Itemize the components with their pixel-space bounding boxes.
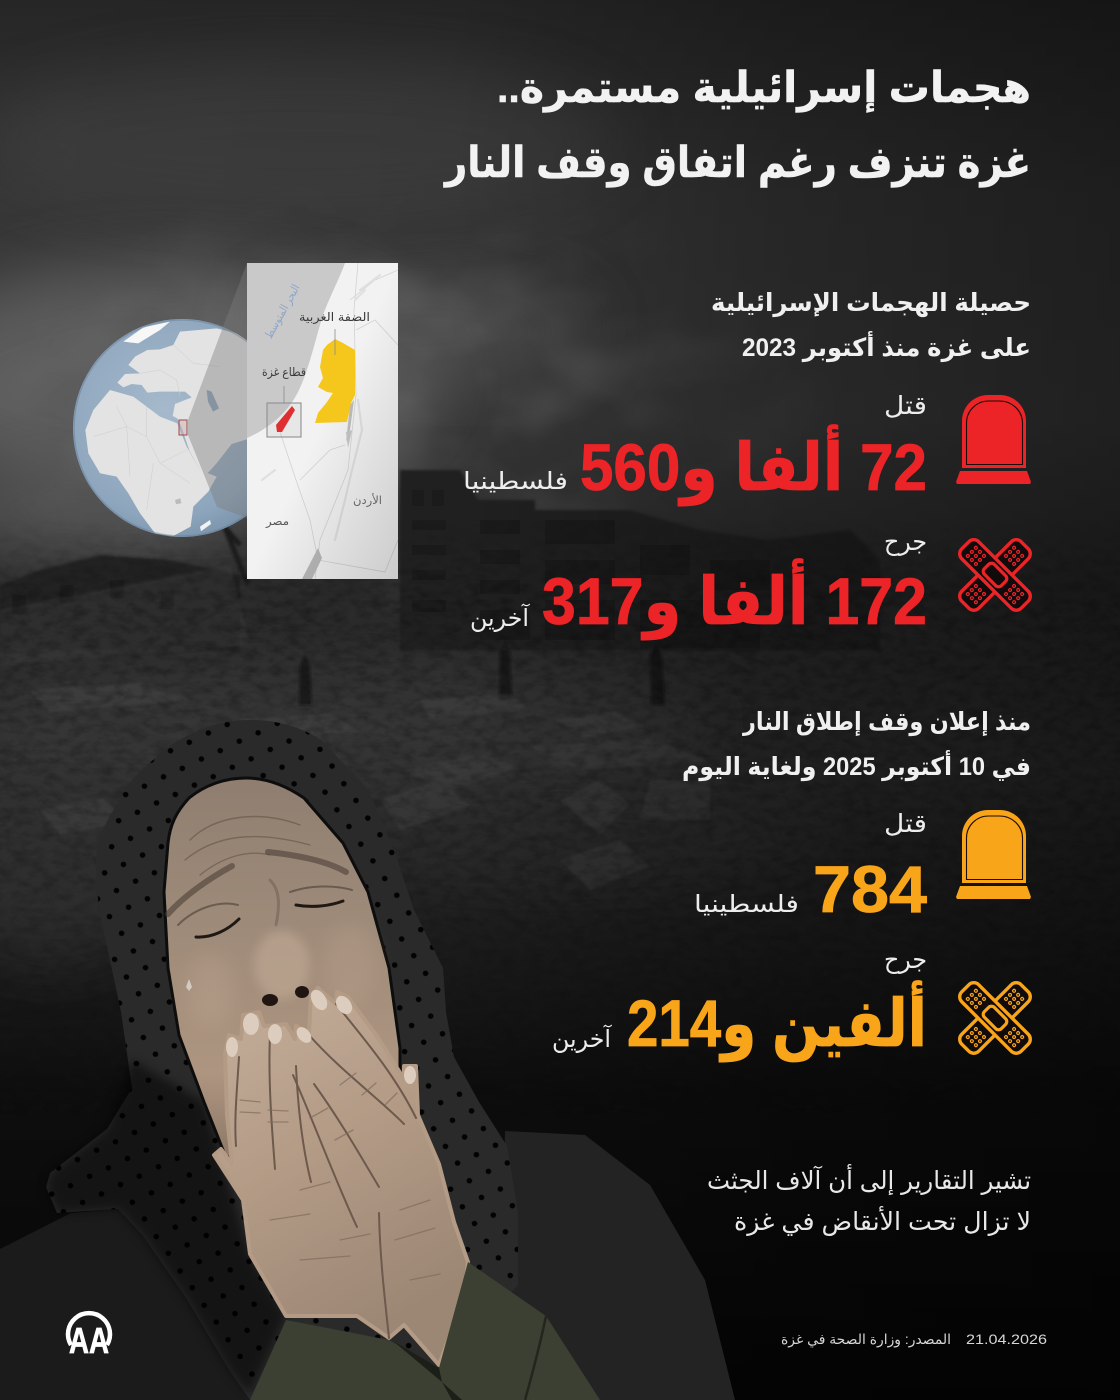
note: bodies under rubble xyxy=(707,1163,1031,1236)
globe edge xyxy=(74,320,290,536)
note: bodies under rubble: تشير التقارير إلى أن آلاف الجثث xyxy=(707,1163,1031,1196)
stat: wounded 172,317: آخرين xyxy=(470,603,530,632)
stat: killed 72,560: قتل xyxy=(884,392,927,420)
map graphic: globe with zoomed locator xyxy=(73,263,398,579)
stat: wounded 2,214: ألفين و214 xyxy=(627,980,927,1063)
terrain and borders xyxy=(280,263,398,579)
icon: orange gravestone xyxy=(956,810,1031,899)
west bank label: الضفة الغربية xyxy=(299,310,370,325)
headscarf xyxy=(46,720,518,1400)
section heading: toll since October 2023: حصيلة الهجمات الإسرائيلية xyxy=(711,289,1031,318)
title xyxy=(443,64,1031,188)
stat: killed 72,560: 72 ألفا و560 xyxy=(580,424,927,507)
stat: wounded 2,214: آخرين xyxy=(552,1024,612,1053)
gaza label: قطاع غزة xyxy=(262,365,306,380)
note: bodies under rubble: لا تزال تحت الأنقاض في غزة xyxy=(734,1205,1031,1236)
tear xyxy=(186,979,192,991)
jordan label: الأردن xyxy=(353,493,382,508)
stat: killed 784: قتل xyxy=(884,810,927,838)
stat: killed 784: 784 xyxy=(813,852,927,926)
section heading: since the ceasefire xyxy=(682,708,1031,782)
globe xyxy=(73,264,247,537)
face xyxy=(164,778,400,1200)
title: غزة تنزف رغم اتفاق وقف النار xyxy=(443,139,1031,188)
section heading: since the ceasefire: في 10 أكتوبر 2025 ولغاية اليوم xyxy=(682,750,1031,782)
section heading: toll since October 2023 xyxy=(711,289,1031,363)
logo: Anadolu Agency xyxy=(68,1313,110,1361)
forehead wrinkles xyxy=(185,817,310,875)
stat: wounded 172,317 xyxy=(470,528,927,641)
sleeve xyxy=(250,1262,600,1400)
stat: killed 784: فلسطينيا xyxy=(694,891,799,918)
section heading: toll since October 2023: على غزة منذ أكتوبر 2023 xyxy=(742,331,1031,363)
egypt label: مصر xyxy=(265,516,289,529)
hands xyxy=(214,987,468,1365)
icon: red bandage xyxy=(957,537,1033,613)
nose xyxy=(254,931,310,999)
source and date xyxy=(781,1331,1047,1348)
logo: Anadolu Agency: AA xyxy=(69,1320,109,1361)
west bank xyxy=(315,339,355,423)
stat: wounded 2,214 xyxy=(552,946,927,1063)
icon: red gravestone xyxy=(956,395,1031,484)
stat: wounded 172,317: 172 ألفا و317 xyxy=(542,558,927,641)
mediterranean label: البحر المتوسط xyxy=(263,283,303,341)
icon: orange bandage xyxy=(957,980,1033,1056)
stat: killed 72,560 xyxy=(463,392,927,507)
background: smoke and destroyed city xyxy=(0,0,1120,1042)
source and date: 21.04.2026 xyxy=(966,1331,1047,1347)
inset map xyxy=(247,263,398,579)
zoom wedge xyxy=(188,263,247,518)
source and date: المصدر: وزارة الصحة في غزة xyxy=(781,1331,951,1348)
photo: crying Palestinian woman xyxy=(0,720,735,1400)
jacket xyxy=(0,1209,250,1400)
stat: killed 784 xyxy=(694,810,927,926)
stat: killed 72,560: فلسطينيا xyxy=(463,468,568,495)
section heading: since the ceasefire: منذ إعلان وقف إطلاق النار xyxy=(741,708,1031,737)
stat: wounded 172,317: جرح xyxy=(884,528,927,556)
stat: wounded 2,214: جرح xyxy=(884,946,927,974)
eyebrows xyxy=(168,852,346,925)
closed eyes xyxy=(178,886,352,937)
gaza strip xyxy=(276,406,295,432)
title: هجمات إسرائيلية مستمرة.. xyxy=(497,64,1031,113)
land masses xyxy=(85,322,250,536)
